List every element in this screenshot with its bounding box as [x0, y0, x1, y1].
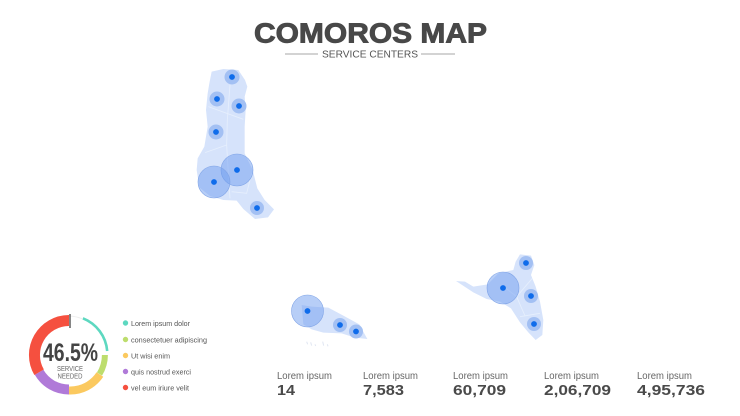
marker: large	[487, 272, 519, 304]
stat: 4,95,736: Lorem ipsum	[637, 371, 692, 382]
stat: 14: 14	[277, 382, 296, 399]
stat: 2,06,709: 2,06,709	[544, 382, 611, 399]
stat: 2,06,709: Lorem ipsum	[544, 371, 599, 382]
marker: large west	[198, 166, 230, 198]
legend item: red: vel eum iriure velit	[131, 384, 189, 392]
segment: purple	[39, 372, 69, 390]
donut value: SERVICE	[57, 366, 83, 373]
stat: 7,583: Lorem ipsum	[363, 371, 418, 382]
map: large island	[197, 69, 274, 219]
donut value	[43, 339, 98, 380]
marker: south	[527, 317, 541, 331]
legend item: green: consectetuer adipiscing	[131, 336, 207, 344]
track	[69, 316, 82, 319]
map: right island	[456, 254, 543, 340]
stat: 4,95,736: 4,95,736	[637, 382, 705, 399]
marker: east	[349, 324, 363, 338]
legend	[123, 319, 207, 392]
marker: south	[250, 201, 264, 215]
legend item: yellow: Ut wisi enim	[131, 352, 170, 360]
marker: north west	[210, 92, 224, 106]
marker: large east	[221, 154, 253, 186]
stat: 7,583	[363, 371, 418, 399]
marker: north east	[232, 98, 246, 114]
stat: 14: Lorem ipsum	[277, 371, 332, 382]
segment: green	[100, 355, 105, 374]
legend item: teal: Lorem ipsum dolor	[131, 319, 191, 328]
stat: 7,583: 7,583	[363, 382, 404, 399]
stat: 60,709: Lorem ipsum	[453, 371, 508, 382]
marker: large	[292, 295, 324, 327]
donut chart	[34, 314, 107, 391]
donut value: 46.5%	[43, 339, 98, 367]
donut value: NEEDED	[58, 374, 82, 380]
stat: 60,709: 60,709	[453, 382, 506, 399]
legend item: purple: quis nostrud exerci	[131, 368, 191, 376]
marker: east	[524, 289, 538, 303]
marker: middle	[333, 318, 347, 332]
segment: red	[34, 320, 69, 372]
subtitle: service centers: SERVICE CENTERS	[322, 50, 418, 60]
title: COMOROS MAP	[254, 18, 487, 48]
segment: teal	[83, 318, 107, 351]
stat: 2,06,709	[544, 371, 611, 399]
marker: north	[519, 256, 533, 270]
segment: yellow	[69, 374, 100, 391]
map: small island	[292, 295, 367, 346]
marker: north	[224, 70, 240, 84]
marker: centre	[208, 124, 224, 140]
start tick	[69, 314, 71, 328]
stat: 4,95,736	[637, 371, 705, 399]
stat: 60,709	[453, 371, 508, 399]
stat: 14	[277, 371, 332, 399]
